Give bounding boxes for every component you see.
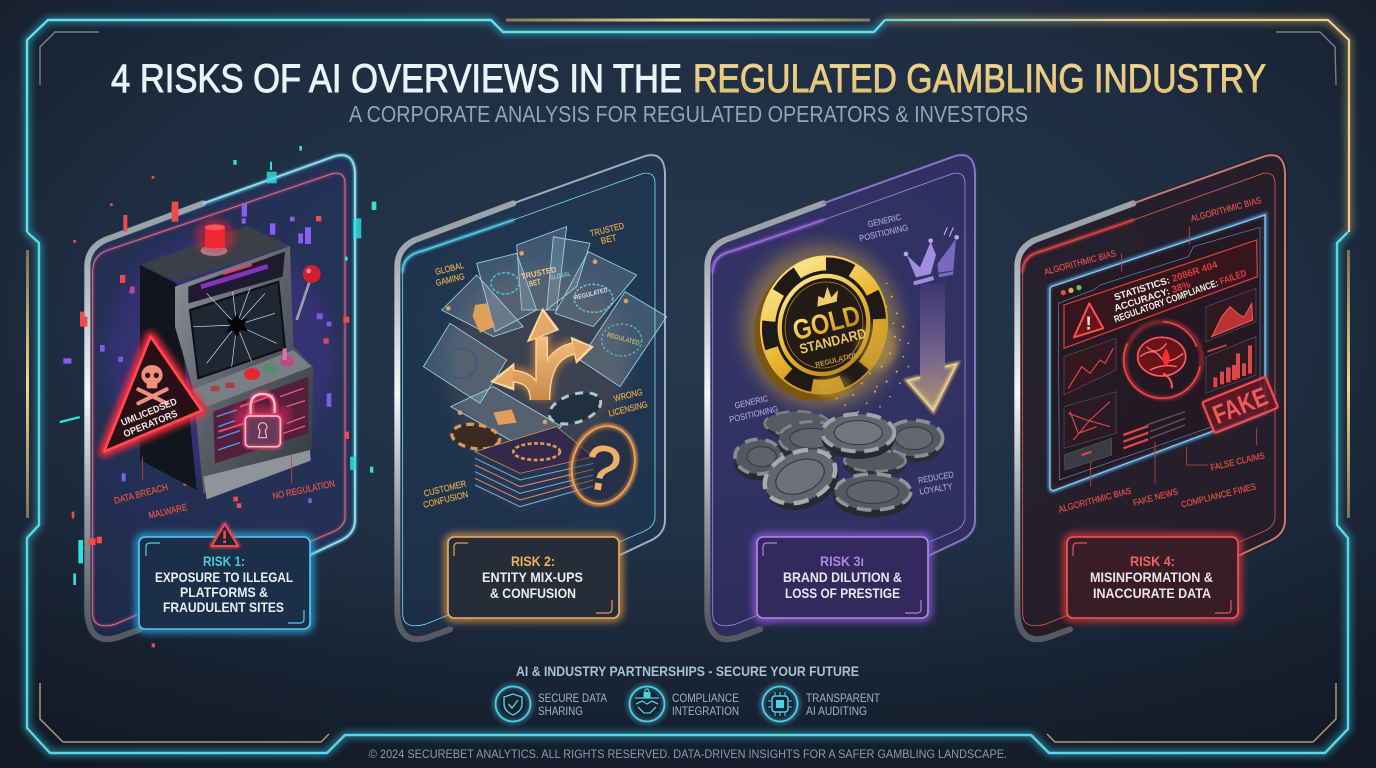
label box: risk 3: BRAND DILUTION &	[783, 569, 902, 585]
alert banner: !	[1086, 312, 1092, 333]
browser window	[1050, 215, 1265, 491]
callouts: GENERIC	[734, 393, 769, 411]
list bars	[1123, 412, 1185, 448]
partnership: secure data sharing: SECURE DATA	[538, 691, 607, 705]
label box: risk 2: & CONFUSION	[490, 585, 576, 601]
callouts: FAKE NEWS	[1132, 486, 1179, 508]
partnership: compliance integration: INTEGRATION	[672, 704, 739, 718]
card text: GLOBAL	[550, 271, 571, 282]
callouts	[728, 212, 954, 497]
gray poker chips	[734, 411, 943, 520]
icon: down arrow	[907, 283, 957, 411]
alert banner	[1064, 240, 1257, 348]
callouts	[422, 220, 649, 510]
right charts	[1206, 288, 1256, 393]
card text	[520, 265, 640, 347]
risk callouts	[113, 455, 336, 521]
callouts: COMPLIANCE FINES	[1180, 481, 1257, 510]
buttons	[211, 348, 294, 391]
icon: shield	[495, 686, 531, 722]
callouts: GENERIC	[867, 212, 902, 229]
art: fake dashboard	[1043, 195, 1278, 515]
warning triangle: unlicensed operators: OPERATORS	[122, 408, 180, 440]
callouts: GAMING	[435, 271, 466, 288]
title: REGULATED GAMBLING INDUSTRY	[693, 57, 1266, 101]
label box: risk 4	[1067, 537, 1238, 618]
partnership: compliance integration	[629, 686, 739, 722]
translucent playing cards	[423, 227, 667, 447]
skull and crossbones	[138, 365, 167, 403]
callouts: WRONG	[613, 387, 644, 404]
alert banner: REGULATORY COMPLIANCE: FAILED	[1113, 268, 1248, 325]
partnership: secure data sharing	[495, 686, 607, 722]
icon: broken crown	[904, 227, 959, 285]
orange card suits	[446, 251, 628, 425]
slot machine cabinet	[140, 226, 313, 499]
art: cards, arrows and chips	[422, 220, 667, 513]
callouts: BET	[600, 232, 618, 246]
card text: REGULATED	[606, 332, 640, 347]
partnership: transparent ai auditing: TRANSPARENT	[806, 691, 881, 705]
card 2 glass	[395, 153, 667, 641]
icon: ai chip	[762, 686, 798, 722]
data lines	[217, 388, 305, 450]
card 1 glass	[85, 153, 357, 641]
risk callouts: DATA BREACH	[113, 482, 169, 506]
connectors	[1091, 227, 1257, 487]
label box: risk 1	[139, 524, 310, 629]
subtitle: A CORPORATE ANALYSIS FOR REGULATED OPERATORS & INVESTORS	[349, 101, 1028, 127]
poker chips	[450, 387, 605, 452]
card emblems	[447, 273, 642, 378]
line charts	[1064, 338, 1116, 470]
panel: risk 1 illegal platforms	[59, 146, 376, 647]
label box: risk 3	[757, 537, 928, 618]
label box: risk 2: RISK 2:	[511, 553, 555, 569]
warning triangle: unlicensed operators: UMLICEDSED	[120, 396, 179, 429]
panel: risk 2 entity mix-ups	[395, 153, 667, 641]
callouts: CUSTOMER	[423, 478, 468, 499]
card text: TRUSTED	[520, 265, 557, 281]
label box: risk 2	[448, 537, 619, 618]
title: 4 RISKS OF AI OVERVIEWS IN THE	[111, 57, 682, 101]
panel: risk 3 brand dilution	[705, 153, 977, 641]
siren light	[195, 218, 235, 256]
gold standard chip	[739, 243, 901, 415]
icon: question mark badge: ?	[579, 431, 626, 506]
label box: risk 4: MISINFORMATION &	[1090, 569, 1213, 585]
label box: risk 1: EXPOSURE TO ILLEGAL	[155, 569, 293, 585]
icon: question mark badge	[563, 419, 644, 511]
callouts: GLOBAL	[434, 260, 465, 277]
gold dust	[815, 282, 909, 412]
partnership: transparent ai auditing	[762, 686, 881, 722]
card 3 glass	[705, 153, 977, 641]
partnerships heading: AI & INDUSTRY PARTNERSHIPS - SECURE YOUR FUTURE	[516, 663, 859, 679]
callouts: ALGORITHMIC BIAS	[1190, 195, 1262, 224]
brain icon	[1124, 322, 1202, 398]
callouts: LICENSING	[607, 399, 649, 419]
label box: risk 3: LOSS OF PRESTIGE	[785, 585, 900, 601]
risk callouts: MALWARE	[148, 502, 188, 521]
icon: broken slot machine	[104, 218, 336, 521]
callouts: POSITIONING	[858, 222, 909, 243]
fake stamp: FAKE	[1208, 381, 1272, 430]
callouts: FALSE CLAIMS	[1210, 450, 1266, 473]
footer copyright: © 2024 SECUREBET ANALYTICS. ALL RIGHTS RESERVED. DATA-DRIVEN INSIGHTS FOR A SAFER GAMBLING LANDSCAPE.	[369, 747, 1007, 761]
callouts: POSITIONING	[728, 404, 779, 425]
card text: BET	[528, 277, 542, 289]
partnership: transparent ai auditing: AI AUDITING	[806, 704, 867, 718]
callouts: TRUSTED	[589, 220, 626, 239]
card text: REGULATED	[574, 287, 609, 302]
icon: small warning triangle	[212, 524, 238, 546]
alert banner: STATISTICS: 2086R 404	[1113, 259, 1220, 304]
label box: risk 1: RISK 1:	[203, 553, 245, 569]
gold standard chip: GOLD	[790, 299, 863, 346]
digital glitch particles	[59, 146, 376, 647]
warning triangle: unlicensed operators	[104, 337, 202, 452]
callouts: ALGORITHMIC BIAS	[1043, 248, 1117, 277]
callouts: ALGORITHMIC BIAS	[1057, 486, 1132, 515]
callouts: LOYALTY	[919, 481, 953, 497]
label box: risk 2: ENTITY MIX-UPS	[482, 569, 583, 585]
callouts	[1043, 195, 1266, 515]
card deck	[475, 427, 593, 513]
art: gold chip and gray chips	[728, 212, 959, 520]
cracked screen	[193, 288, 277, 367]
label box: risk 1: FRAUDULENT SITES	[163, 599, 284, 615]
card 4 glass	[1015, 153, 1287, 641]
panel: risk 4 misinformation	[1015, 153, 1287, 641]
callouts: REDUCED	[917, 469, 954, 485]
label box: risk 4: RISK 4:	[1130, 553, 1175, 569]
label box: risk 4: INACCURATE DATA	[1093, 585, 1211, 601]
icon: handshake and lock	[629, 686, 665, 722]
callouts: CONFUSION	[422, 489, 469, 510]
icon: padlock	[245, 394, 280, 447]
partnership: compliance integration: COMPLIANCE	[672, 691, 739, 705]
label box: risk 1: PLATFORMS &	[180, 584, 268, 600]
icon: three-way arrow	[490, 308, 594, 400]
lever	[297, 265, 321, 320]
risk callouts: NO REGULATION	[272, 478, 336, 501]
partnership: secure data sharing: SHARING	[538, 704, 583, 718]
label box: risk 3: RISK 3ı	[820, 553, 864, 569]
gold standard chip: REGULATION	[814, 350, 859, 369]
gold standard chip: STANDARD	[798, 325, 868, 357]
alert banner: ACCURACY: 38%	[1113, 279, 1193, 315]
